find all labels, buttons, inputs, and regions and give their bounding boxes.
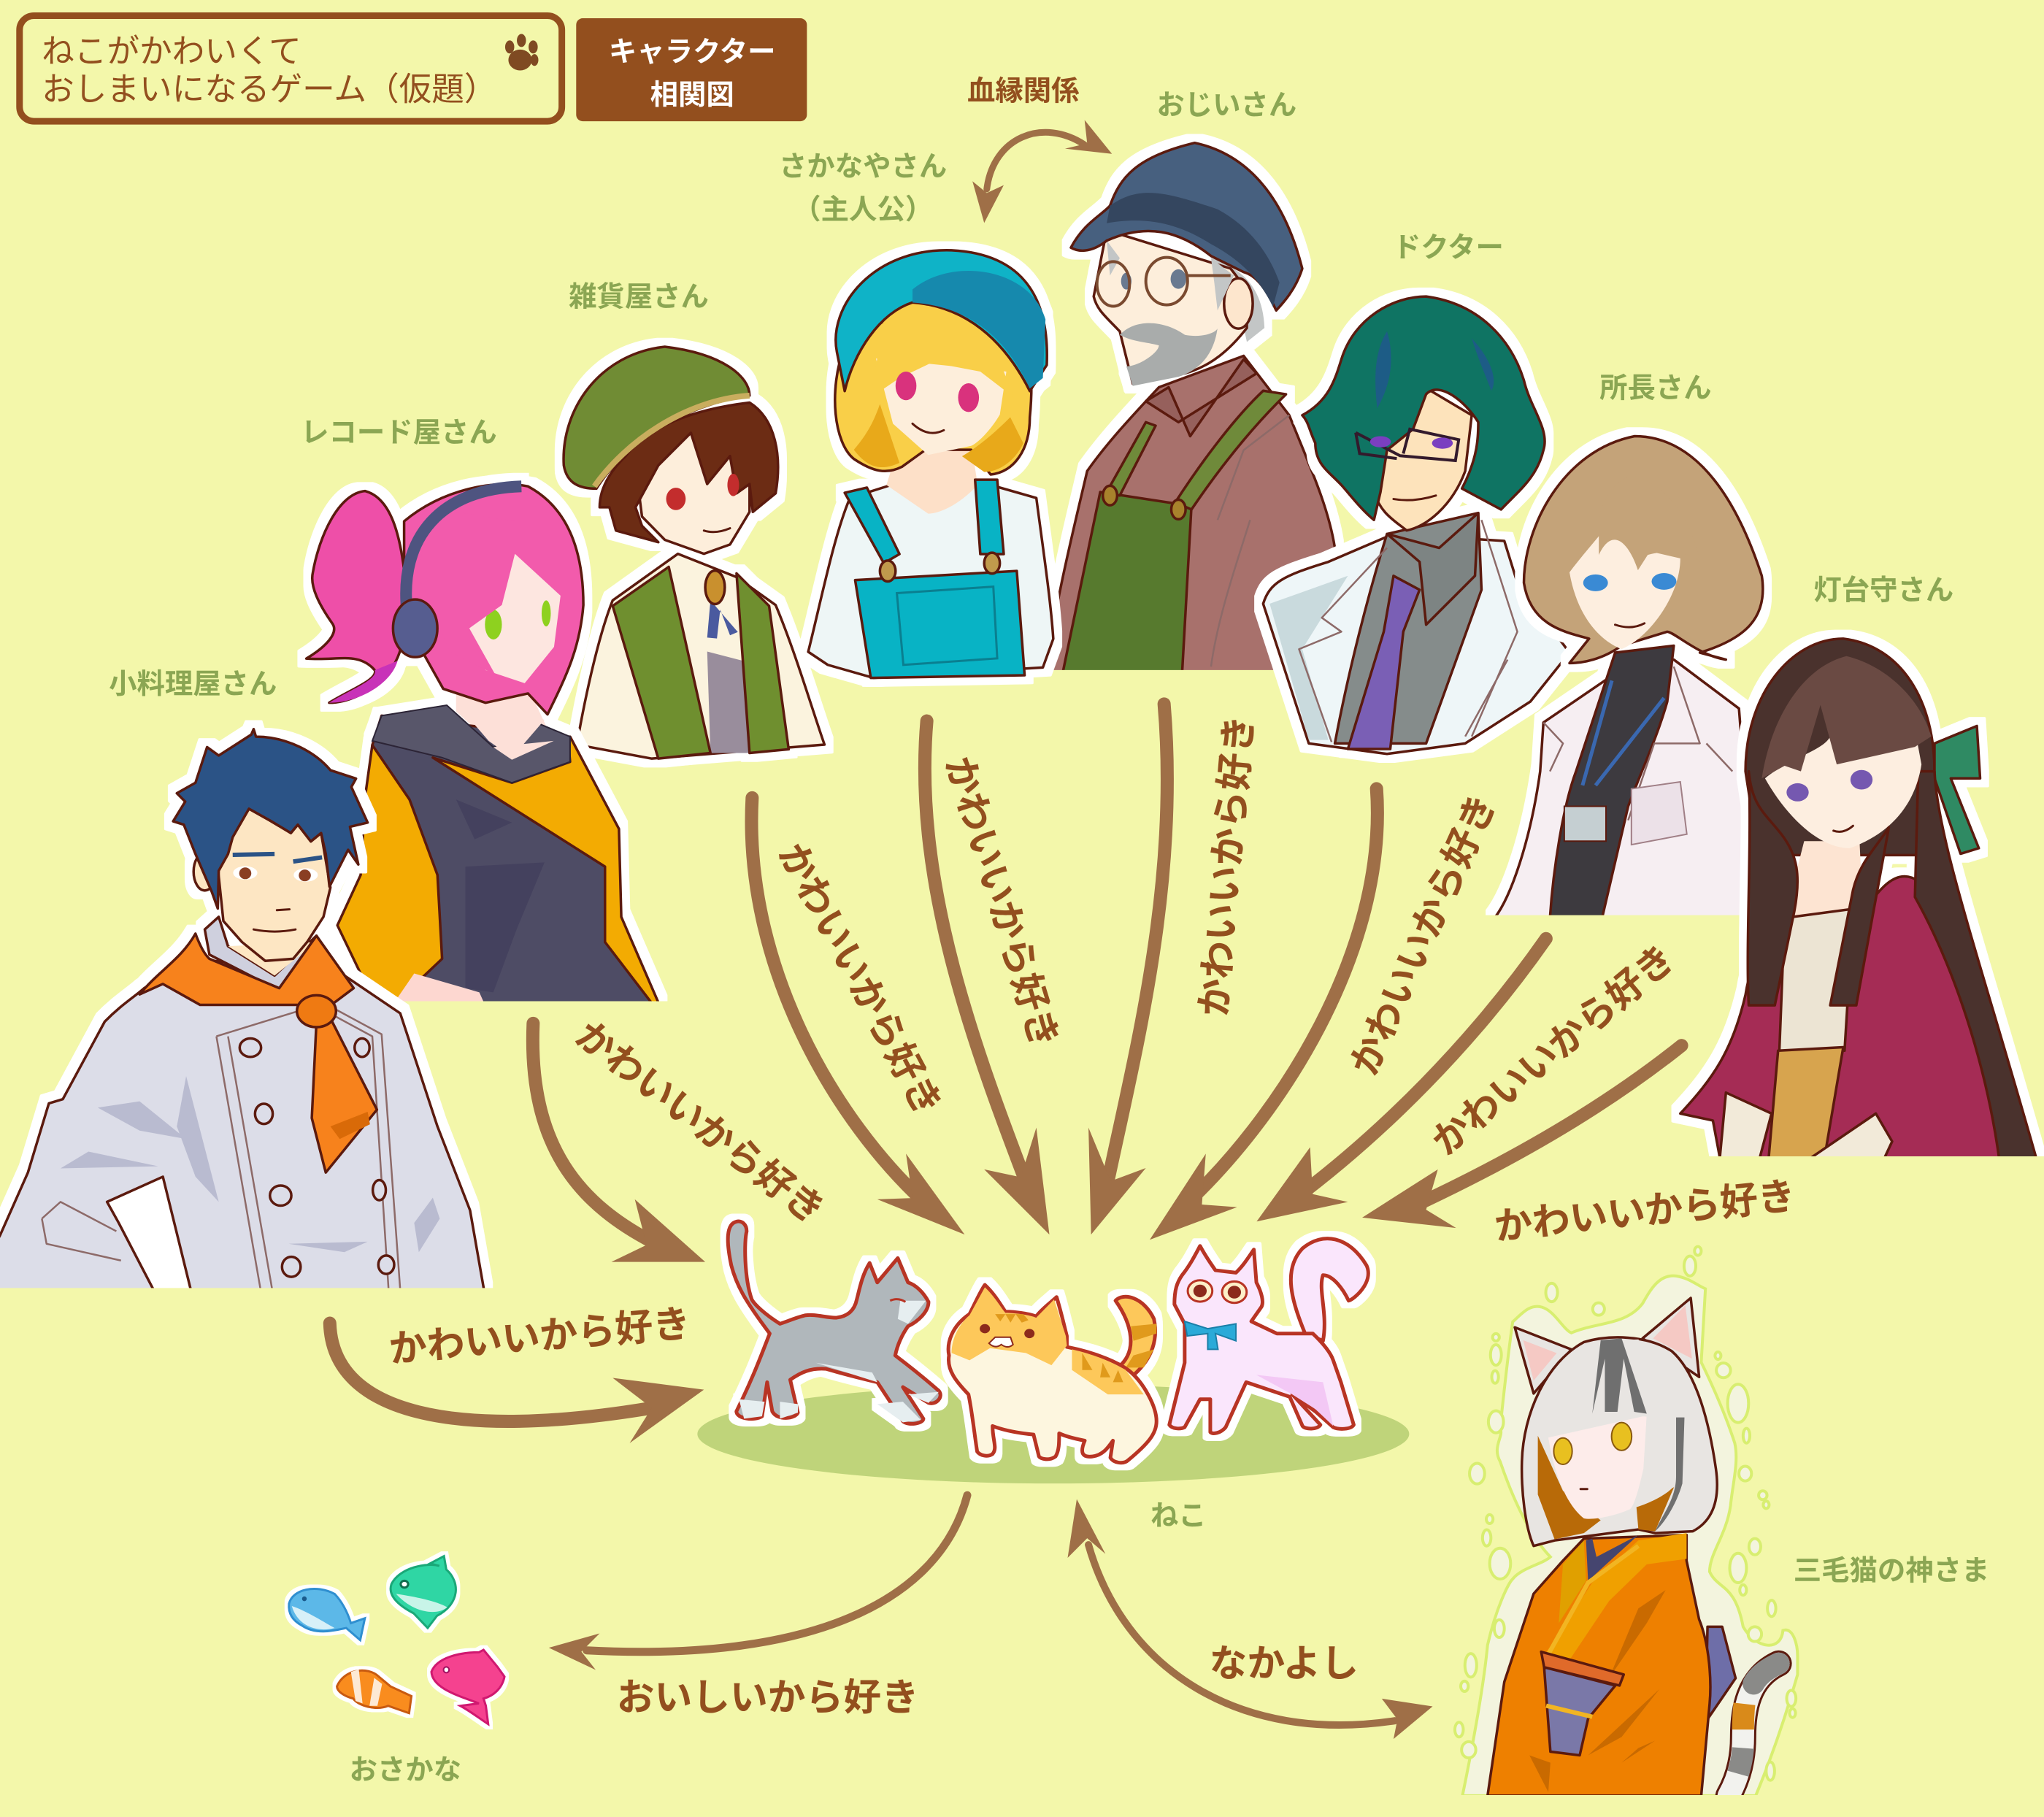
arm skin [393,973,484,1003]
hair [835,287,1031,475]
jacket [577,554,824,758]
glasses [1356,429,1459,461]
neck [1785,841,1863,918]
hair [1522,1337,1717,1546]
lab coat [1263,534,1570,754]
arrow: director to cats [1256,939,1546,1221]
cat: gray [728,1221,940,1424]
back obi [1705,1626,1736,1722]
face [1094,230,1247,384]
character: chef [0,729,484,1290]
scarf [139,934,377,1172]
tie [1348,576,1420,749]
aura bubbles [1455,1247,1796,1780]
cat: orange tabby [948,1285,1156,1463]
jacket [0,959,484,1290]
character: fishmonger protagonist [808,250,1053,678]
hair [404,484,583,715]
obi [1544,1667,1615,1756]
face [1548,1415,1647,1519]
shirt [1045,356,1335,680]
badge: character relationship chart: キャラクター [609,37,776,68]
ear [193,853,216,891]
arrow label: general store: かわいいから好き [771,836,950,1123]
beret [564,347,750,488]
arrow label: lighthouse keeper: かわいいから好き [1493,1174,1797,1248]
face [636,429,750,554]
character: general store owner [564,347,824,758]
label: director: 所長さん [1599,373,1712,404]
side strands [1748,772,1889,1005]
eyes [233,867,258,880]
shawl [1680,869,2006,1162]
arrow: blood relation [972,120,1112,223]
dark hoodie [372,715,652,1003]
tail [1291,1239,1368,1341]
bolo tie [707,600,738,639]
label: fishmonger: さかなやさん [779,151,947,183]
tail [1115,1297,1156,1378]
label: general store: 雑貨屋さん [569,282,709,313]
arrow: lighthouse keeper to cats [1362,1045,1682,1228]
fish: blue [289,1589,365,1640]
badge [1564,806,1606,841]
title box: ねこがかわいくて [42,34,301,70]
bow [1185,1321,1236,1349]
ground ellipse [697,1384,1409,1483]
arrow label: record shop: かわいいから好き [568,1013,832,1232]
inner brown hair [1538,1436,1674,1540]
hair [1524,436,1763,663]
badge: character relationship chart [576,18,807,121]
face [1570,520,1680,649]
cat god label: 三毛猫の神さま [1794,1555,1989,1586]
arrow: cats and cat god friends [1067,1499,1432,1739]
eyes [1188,1280,1213,1302]
heading: blood relation: 血縁関係 [967,76,1080,107]
cap [1071,143,1302,310]
arrow: fishmonger to cats [925,721,1050,1234]
arrow: general store to cats [751,798,964,1234]
long hair right [1915,772,2037,1162]
hair [599,402,778,542]
right side lock [1632,1414,1680,1508]
hair [1302,296,1545,520]
body [948,1285,1156,1463]
face [1765,729,1921,848]
blouse [1780,907,1863,1050]
badge: character relationship chart: 相関図 [650,80,734,111]
label: protagonist: （主人公） [793,194,933,226]
label: small restaurant: 小料理屋さん [109,669,277,700]
shirt [808,483,1053,678]
overalls [855,571,1025,678]
face [876,358,1007,455]
cat: pink with bow [1169,1239,1368,1433]
vest [612,567,788,758]
buttons [239,1038,261,1057]
twin tail [307,491,406,703]
character: lighthouse keeper [1680,639,2037,1162]
glasses [1146,258,1188,305]
label: record shop: レコード屋さん [301,417,497,448]
kimono [1488,1535,1710,1796]
label: lighthouse keeper: 灯台守さん [1813,575,1953,606]
character: director [1494,436,1763,918]
bangs [1544,1340,1649,1440]
orange base hoodie [337,737,658,1003]
arrow: grandfather to cats [1088,704,1167,1234]
hair [173,729,368,908]
apron [1061,492,1191,680]
fish label: おさかな [350,1755,461,1786]
skirt [1768,1048,1843,1162]
cat label: ねこ [1150,1500,1207,1532]
fish: pink sea bream [431,1650,504,1724]
arrow label: fishmonger: かわいいから好き [937,751,1067,1053]
collar [205,917,317,996]
arrow: record shop to cats [533,1023,705,1262]
eyes [1553,1438,1572,1464]
fish: clownfish [337,1670,412,1713]
neck [886,443,977,514]
character: calico cat god [1455,1247,1797,1796]
arrow: cats to fish [549,1495,967,1670]
character: grandfather [1045,143,1335,680]
arrow: chef to cats [330,1324,704,1443]
arrow label: doctor: かわいいから好き [1342,788,1504,1081]
hat [836,250,1047,391]
arrow label: director: かわいいから好き [1424,937,1683,1163]
arrow label: chef: かわいいから好き [388,1302,692,1370]
ribbon [1934,726,1980,854]
fish: green [391,1556,456,1628]
hair back [1211,258,1264,342]
face [216,809,331,961]
fish group [289,1556,504,1724]
icon: paw [505,34,539,70]
face [463,554,561,683]
face [1358,380,1472,531]
ears [1515,1327,1572,1394]
lab coat [1494,660,1755,918]
arrow label: good friends: なかよし [1210,1642,1359,1684]
title box: おしまいになるゲーム（仮題） [42,72,497,108]
neck [456,653,549,758]
arm gap [107,1177,191,1290]
head patch [952,1287,1067,1365]
shirt [1335,513,1481,743]
body [1169,1246,1353,1433]
arrow label: grandfather: かわいいから好き [1192,713,1261,1018]
label: doctor: ドクター [1393,232,1504,264]
tail [1729,1664,1779,1796]
arrow label: tasty: おいしいから好き [617,1676,919,1718]
character: record shop owner [307,484,658,1003]
sweater [707,652,750,753]
arrow: doctor to cats [1150,788,1378,1240]
hair back [1745,639,1934,855]
sleeves [1719,1093,1892,1162]
label: grandfather: おじいさん [1156,90,1296,121]
turtleneck [1550,645,1674,918]
bangs [1761,656,1932,778]
aura [1462,1276,1797,1796]
jacket folds [61,1076,439,1252]
character: doctor [1263,296,1570,754]
hair stripe [1592,1338,1647,1414]
title box [20,15,562,121]
headphones [406,486,521,615]
